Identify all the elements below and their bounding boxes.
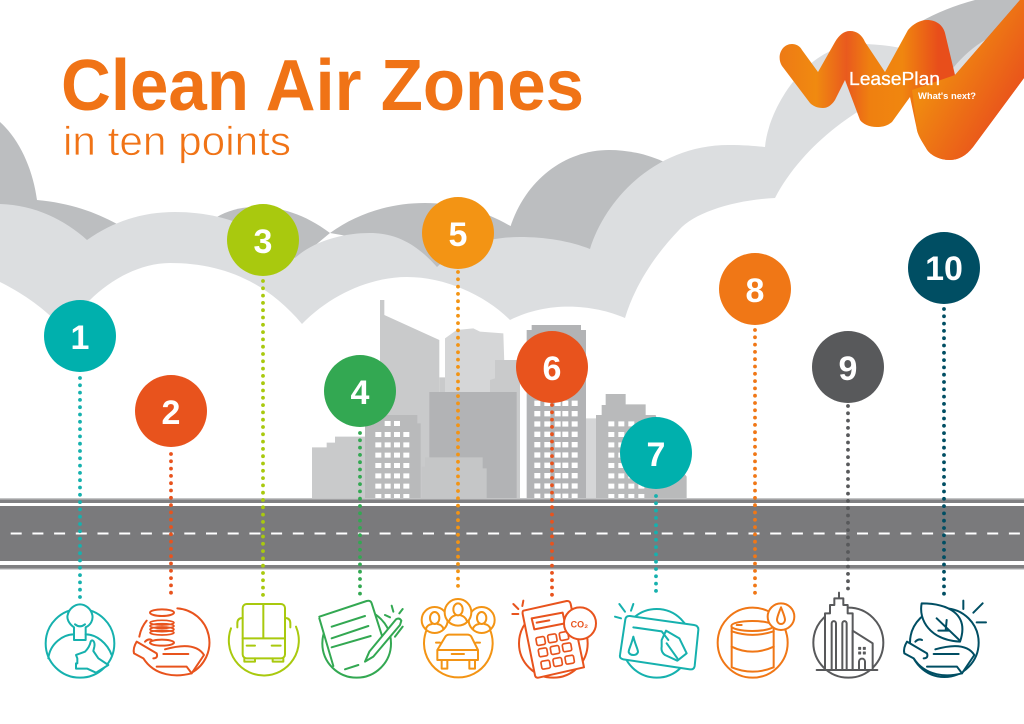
number circle 2 <box>135 375 207 447</box>
dark cloud layer <box>0 0 1024 270</box>
icon: bus <box>229 604 299 675</box>
number circle 6: 6 <box>543 350 561 388</box>
title: Clean Air Zones <box>61 46 584 126</box>
logo final stroke <box>912 0 1024 160</box>
icon: fuel card <box>615 604 698 678</box>
centre block <box>429 392 517 499</box>
subtitle: in ten points <box>63 118 291 164</box>
icon: CO2 calculator <box>512 601 596 678</box>
number circle 10: 10 <box>925 250 963 288</box>
number circle 5 <box>422 197 494 269</box>
tower behind circle 6 <box>527 325 586 498</box>
number circle 4: 4 <box>351 374 370 412</box>
number circle 5: 5 <box>449 216 467 254</box>
icon: leaf in hand <box>904 601 986 677</box>
number circle 9 <box>812 331 884 403</box>
logo tagline: What's next? <box>918 91 976 102</box>
number circle 8: 8 <box>746 272 764 310</box>
number circle 3 <box>227 204 299 276</box>
icon: signing document <box>319 601 403 678</box>
number circle 9: 9 <box>839 350 857 388</box>
clouds background <box>0 0 1024 325</box>
number circle 1: 1 <box>71 319 89 357</box>
number circle 3: 3 <box>254 223 272 261</box>
number circle 7 <box>620 417 692 489</box>
number circle 6 <box>516 331 588 403</box>
logo wordmark: LeasePlan <box>849 68 940 89</box>
icon: car with people <box>422 599 495 677</box>
right building <box>596 394 687 498</box>
skyline <box>312 300 687 499</box>
icon: coins in hand <box>134 608 209 675</box>
logo ribbon <box>780 0 1024 160</box>
icon: city buildings <box>813 593 883 678</box>
light cloud layer <box>0 40 985 325</box>
number circle 2: 2 <box>162 394 180 432</box>
number circle 1 <box>44 300 116 372</box>
icon: oil barrel <box>718 603 794 678</box>
background buildings <box>312 300 477 498</box>
road <box>0 498 1024 570</box>
left office building <box>365 415 421 498</box>
number circle 7: 7 <box>647 436 665 474</box>
icon: driver thumbs up <box>46 604 114 678</box>
dotted connector lines <box>80 272 944 598</box>
icon: CO2 calculator: CO₂ <box>571 620 588 630</box>
number circle 10 <box>908 232 980 304</box>
logo <box>780 0 1024 160</box>
number circle 4 <box>324 355 396 427</box>
number circle 8 <box>719 253 791 325</box>
